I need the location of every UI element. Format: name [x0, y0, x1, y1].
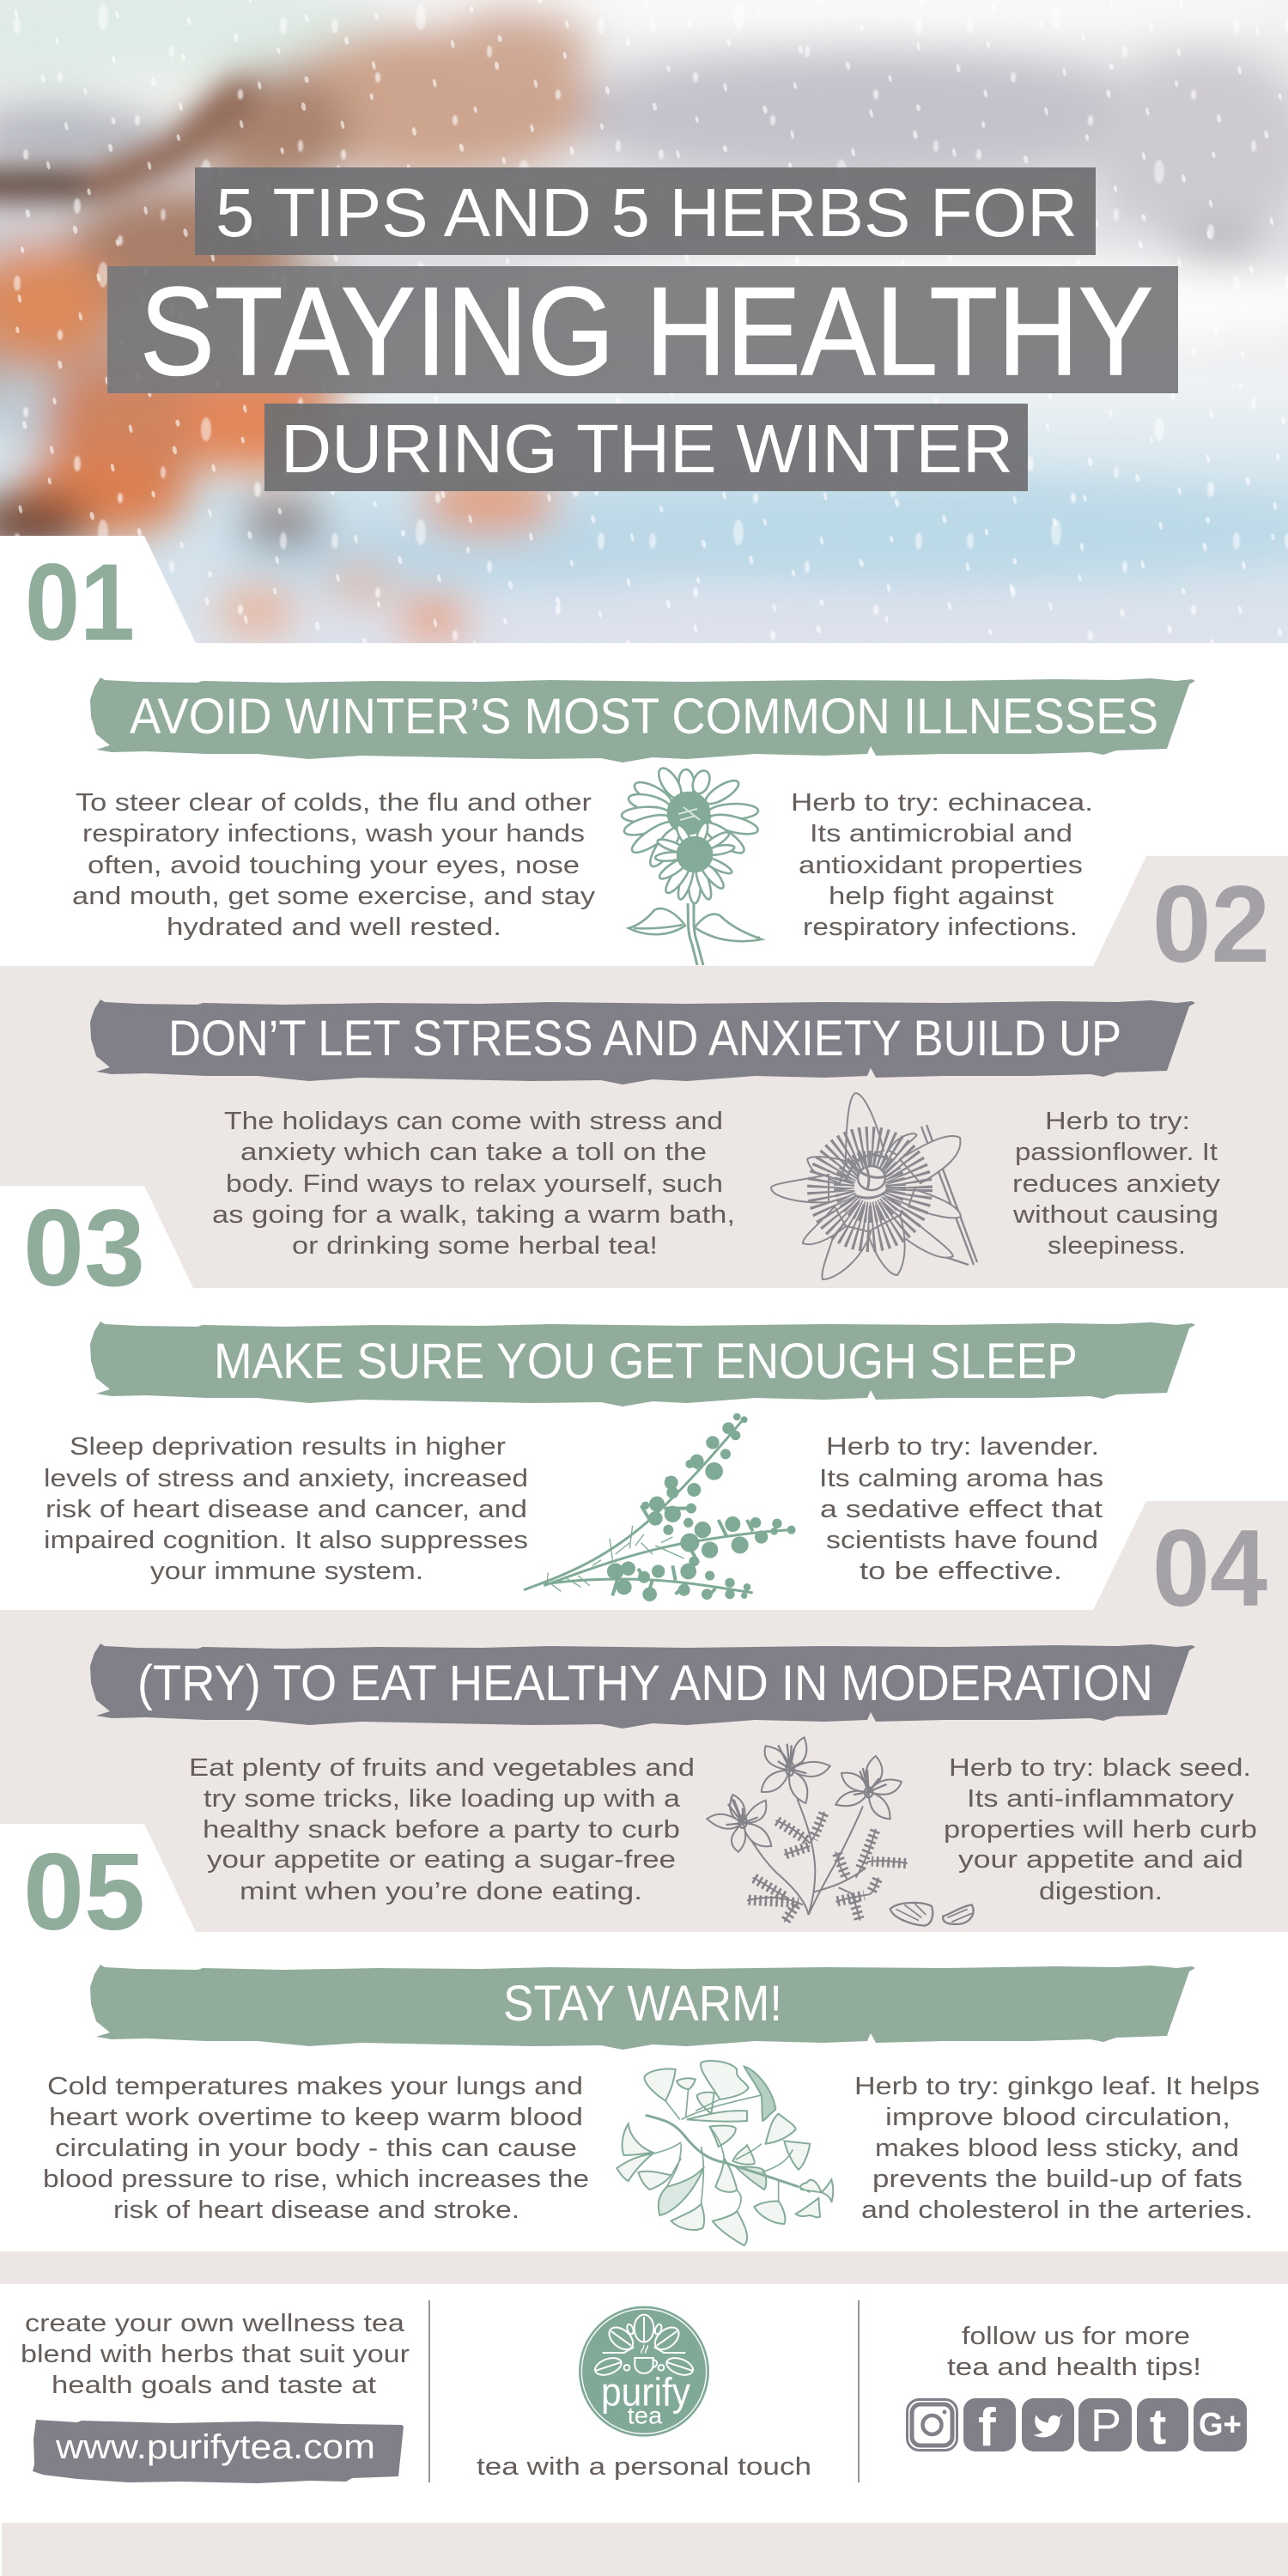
text: tip 1 body: often, avoid touching your eyes, nose	[88, 852, 580, 879]
tab: number 05: 05	[23, 1831, 145, 1953]
panel: tip 5	[43, 1965, 1260, 2245]
text: herb ginkgo: Herb to try: ginkgo leaf. It helps	[854, 2073, 1260, 2100]
icon: tumblr: t	[1150, 2399, 1166, 2455]
text: call to action: blend with herbs that suit your	[21, 2341, 410, 2368]
tab: number 03	[0, 1186, 193, 1309]
icon: black seed	[707, 1737, 974, 1926]
text: herb passionflower: reduces anxiety	[1012, 1170, 1221, 1198]
text: herb passionflower: passionflower. It	[1015, 1139, 1218, 1166]
title line 2: STAYING HEALTHY	[140, 261, 1153, 401]
divider	[428, 2300, 430, 2482]
panel: tip 4	[0, 1610, 1288, 1932]
text: herb black seed: Its anti-inflammatory	[967, 1785, 1235, 1813]
panel: tip 1	[0, 643, 1288, 966]
title line 3: DURING THE WINTER	[281, 410, 1013, 487]
text: herb passionflower: without causing	[1012, 1201, 1218, 1229]
text: call to action	[21, 2310, 410, 2399]
panel: header photo	[0, 0, 1288, 666]
tab: number 03: 03	[23, 1187, 145, 1309]
text: herb lavender: Its calming aroma has	[819, 1465, 1103, 1492]
tab: number 02: 02	[1152, 863, 1270, 985]
icon: google plus	[1194, 2398, 1247, 2451]
text: herb ginkgo: and cholesterol in the arteries.	[861, 2196, 1253, 2224]
text: herb lavender	[819, 1433, 1103, 1585]
text: herb black seed: properties will herb curb	[944, 1816, 1257, 1844]
icon: lavender	[524, 1415, 793, 1600]
text: tip 5 body: risk of heart disease and stroke.	[113, 2196, 519, 2224]
text: herb lavender: a sedative effect that	[820, 1496, 1103, 1523]
tab: number 05	[0, 1824, 196, 1953]
text: tip 3 body: impaired cognition. It also suppresses	[44, 1527, 528, 1554]
banner: tip 4: (TRY) TO EAT HEALTHY AND IN MODERATION	[137, 1656, 1153, 1711]
icons: social media	[907, 2398, 1247, 2458]
text: call to action: health goals and taste at	[52, 2372, 376, 2399]
text: herb black seed: Herb to try: black seed.	[949, 1754, 1251, 1782]
logo: purify tea: tea	[628, 2403, 663, 2429]
bottom strip	[2, 2523, 1288, 2576]
text: herb ginkgo	[854, 2073, 1260, 2224]
banner: tip 3: MAKE SURE YOU GET ENOUGH SLEEP	[214, 1334, 1078, 1389]
title	[107, 167, 1178, 491]
text: tip 5 body: circulating in your body - this can cause	[55, 2135, 577, 2162]
text: herb passionflower: Herb to try:	[1045, 1108, 1190, 1135]
text: herb echinacea: Herb to try: echinacea.	[791, 789, 1093, 817]
icon: pinterest: P	[1091, 2400, 1121, 2451]
text: tip 3 body: risk of heart disease and cancer, and	[46, 1496, 527, 1523]
text: herb echinacea: help fight against	[829, 883, 1054, 910]
text: herb ginkgo: improve blood circulation,	[885, 2104, 1230, 2131]
text: tip 4 body: Eat plenty of fruits and vegetables and	[189, 1754, 695, 1782]
tab: number 04	[1093, 1501, 1288, 1629]
divider	[858, 2300, 860, 2482]
text: herb lavender: to be effective.	[860, 1558, 1062, 1585]
banner: tip 2: DON’T LET STRESS AND ANXIETY BUILD UP	[168, 1011, 1121, 1066]
icon: ginkgo leaf	[617, 2061, 833, 2245]
banner: tip 2	[90, 999, 1195, 1084]
text: tip 5 body	[43, 2073, 589, 2224]
text: tip 1 body: and mouth, get some exercise, and stay	[72, 883, 596, 910]
text: herb echinacea: respiratory infections.	[803, 914, 1078, 941]
banner: website: www.purifytea.com	[55, 2428, 375, 2466]
text: call to action: create your own wellness tea	[25, 2310, 405, 2337]
text: tip 5 body: heart work overtime to keep warm blood	[49, 2104, 583, 2131]
tab: number 01: 01	[25, 541, 135, 663]
text: tip 4 body: healthy snack before a party to curb	[203, 1816, 680, 1844]
banner: tip 5: STAY WARM!	[503, 1976, 782, 2032]
text: tip 2 body: or drinking some herbal tea!	[292, 1232, 658, 1260]
text: tip 1 body	[72, 789, 596, 941]
icon: instagram	[907, 2399, 957, 2451]
text: tip 2 body: anxiety which can take a toll on the	[240, 1139, 707, 1166]
text: follow us: tea and health tips!	[947, 2354, 1201, 2381]
icon: google plus: G+	[1199, 2407, 1242, 2443]
text: herb passionflower: sleepiness.	[1048, 1232, 1186, 1260]
icon: echinacea	[622, 764, 762, 965]
text: tip 3 body	[44, 1433, 528, 1585]
banner: tip 5	[90, 1965, 1195, 2050]
text: tip 2 body: as going for a walk, taking a warm bath,	[212, 1201, 735, 1229]
text: tip 3 body: Sleep deprivation results in higher	[70, 1433, 506, 1461]
strip above footer	[0, 2251, 1288, 2284]
text: tip 2 body: body. Find ways to relax yourself, such	[226, 1170, 723, 1198]
text: herb echinacea: Its antimicrobial and	[810, 820, 1072, 848]
banner: tip 4	[90, 1643, 1195, 1728]
text: tip 1 body: respiratory infections, wash your hands	[82, 820, 585, 848]
banner: tip 3	[90, 1321, 1195, 1406]
text: tip 3 body: levels of stress and anxiety, increased	[44, 1465, 528, 1492]
panel: footer	[21, 2300, 1247, 2483]
text: tip 5 body: Cold temperatures makes your lungs and	[47, 2073, 583, 2100]
tab: number 02	[1093, 856, 1288, 985]
text: herb ginkgo: prevents the build-up of fats	[872, 2166, 1242, 2193]
panel: tip 2	[0, 966, 1288, 1288]
logo leaves and cup	[592, 2315, 696, 2379]
text: tip 1 body: hydrated and well rested.	[167, 914, 501, 941]
tab: number 04: 04	[1152, 1507, 1267, 1629]
text: follow us	[947, 2323, 1201, 2381]
text: tip 4 body	[189, 1754, 695, 1905]
tab: number 01	[0, 536, 196, 663]
title line 1: 5 TIPS AND 5 HERBS FOR	[216, 174, 1078, 251]
text: tip 2 body: The holidays can come with stress and	[224, 1108, 723, 1135]
text: herb lavender: scientists have found	[826, 1527, 1098, 1554]
banner: tip 1	[90, 677, 1195, 762]
icon: facebook	[963, 2398, 1016, 2458]
text: tip 2 body	[212, 1108, 735, 1260]
logo: purify tea	[579, 2306, 709, 2437]
text: herb black seed: digestion.	[1039, 1878, 1163, 1905]
text: herb echinacea	[791, 789, 1093, 941]
text: herb passionflower	[1012, 1108, 1221, 1260]
icon: twitter	[1022, 2398, 1074, 2451]
text: herb black seed	[944, 1754, 1257, 1905]
text: herb echinacea: antioxidant properties	[799, 852, 1083, 879]
icon: tumblr	[1137, 2398, 1188, 2455]
text: follow us: follow us for more	[962, 2323, 1190, 2350]
banner: website	[33, 2420, 404, 2483]
banner: tip 1: AVOID WINTER’S MOST COMMON ILLNESSES	[130, 689, 1158, 744]
text: herb lavender: Herb to try: lavender.	[826, 1433, 1099, 1461]
text: tagline: tea with a personal touch	[477, 2453, 811, 2481]
text: tip 1 body: To steer clear of colds, the flu and other	[76, 789, 592, 817]
icon: pinterest	[1078, 2398, 1132, 2451]
text: tip 4 body: mint when you’re done eating.	[240, 1878, 642, 1905]
text: tip 4 body: try some tricks, like loading up with a	[204, 1785, 681, 1813]
icon: passionflower	[771, 1093, 977, 1279]
panel: tip 3	[44, 1321, 1195, 1600]
text: tip 3 body: your immune system.	[150, 1558, 423, 1585]
logo: purify tea: purify	[601, 2370, 690, 2415]
text: herb ginkgo: makes blood less sticky, and	[875, 2135, 1239, 2162]
text: tip 5 body: blood pressure to rise, which increases the	[43, 2166, 589, 2193]
text: tip 4 body: your appetite or eating a sugar-free	[207, 1846, 676, 1874]
text: herb black seed: your appetite and aid	[958, 1846, 1243, 1874]
icon: facebook: f	[978, 2398, 996, 2458]
